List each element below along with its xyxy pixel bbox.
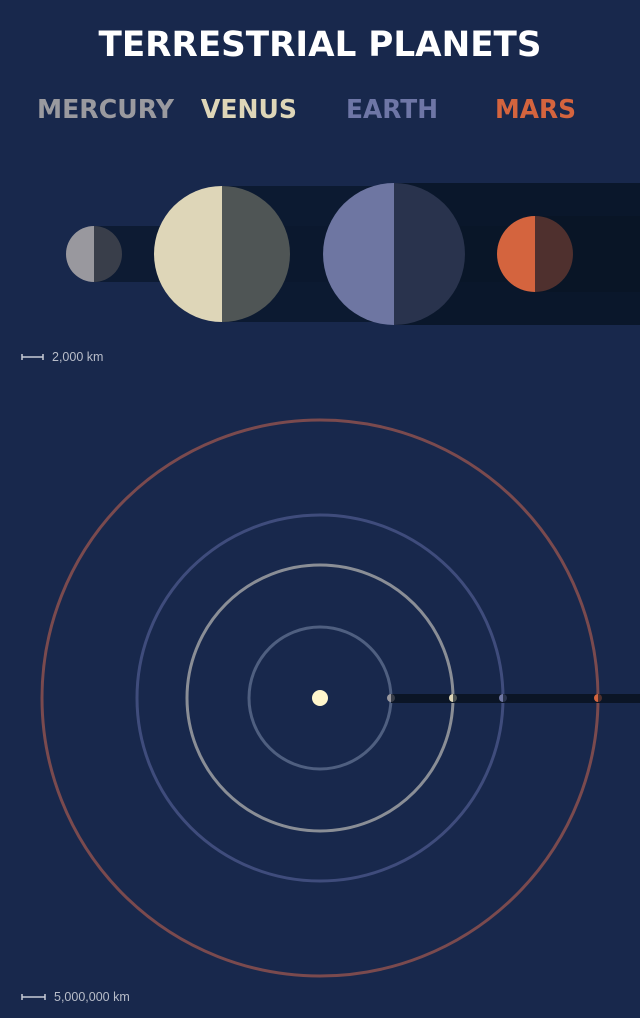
planet labels: VENUS [201,95,297,125]
orbit planets [387,694,602,702]
planet labels: MARS [495,95,576,125]
planet: earth [323,183,465,325]
planet size comparison [66,183,640,325]
planet: venus [154,186,290,322]
scale bar: 2,000 km [22,350,103,364]
planet labels [37,95,576,125]
scale bar: 2,000 km: 2,000 km [52,350,103,364]
scale bar: 5,000,000 km: 5,000,000 km [54,990,130,1004]
planet labels: EARTH [346,95,438,125]
planet labels: MERCURY [37,95,175,125]
planet: mars [497,216,573,292]
orbit diagram [42,420,598,976]
planet: mercury [66,226,122,282]
sun [312,690,328,706]
title: TERRESTRIAL PLANETS [98,25,542,65]
orbit shadow bar [391,694,640,703]
